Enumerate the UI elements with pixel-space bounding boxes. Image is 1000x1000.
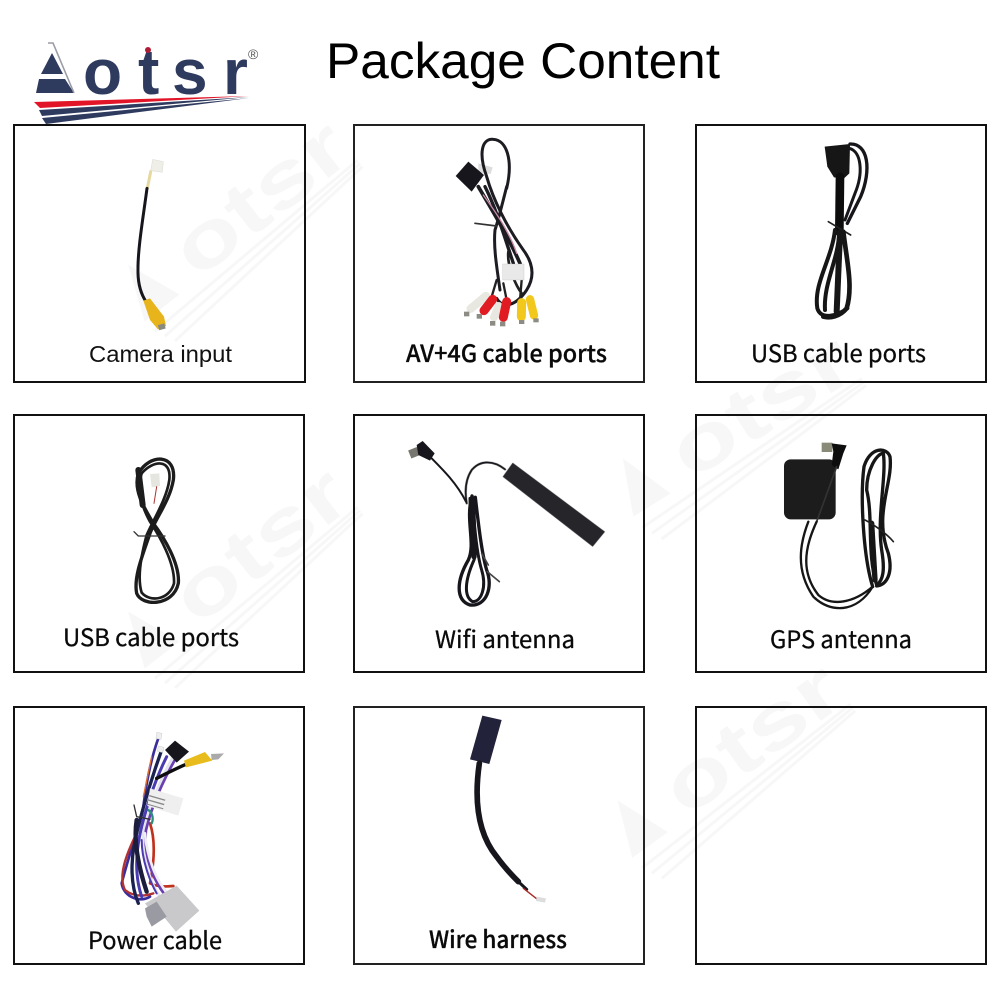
cable: camera input (138, 159, 166, 330)
label: camera input: Camera input (89, 341, 233, 367)
panel: USB cable ports, middle (14, 415, 304, 672)
label: wifi antenna: Wifi antenna (435, 620, 575, 655)
label: AV+4G cable ports: AV+4G cable ports (406, 334, 607, 369)
watermark: lower right: otsr (645, 644, 858, 832)
label: GPS antenna: GPS antenna (770, 620, 912, 655)
label: USB cable ports: USB cable ports (63, 618, 239, 653)
cable: USB coil (134, 459, 178, 602)
panel: wire harness (354, 707, 644, 964)
label: USB cable ports: USB cable ports (751, 334, 926, 369)
cable: power harness (122, 732, 224, 932)
logo: Aotsr (34, 36, 259, 124)
panel: GPS antenna (696, 415, 986, 672)
icon: GPS antenna (784, 443, 893, 608)
watermark: lower right (590, 644, 868, 885)
panel: power cable (14, 707, 304, 964)
logo: Aotsr: otsr (83, 36, 248, 108)
label: power cable: Power cable (88, 921, 222, 956)
panel: camera input (14, 125, 305, 382)
watermark: middle right (596, 315, 878, 545)
panel: empty (696, 707, 986, 964)
logo: Aotsr: ® (248, 46, 259, 62)
watermark: middle right: otsr (653, 315, 869, 496)
cable: USB extension (817, 144, 867, 317)
watermark: upper left: otsr (154, 101, 366, 294)
panel: wifi antenna (354, 415, 644, 672)
panel: USB cable ports, top (696, 125, 986, 382)
watermark: middle left: otsr (154, 448, 366, 641)
cable: wire harness (470, 716, 546, 903)
icon: wifi antenna (408, 441, 605, 605)
watermark: upper left (101, 101, 376, 348)
panel: AV+4G cable ports (354, 125, 644, 382)
label: wire harness: Wire harness (429, 920, 567, 955)
cable: AV+4G bundle (456, 139, 539, 326)
watermark: middle left (101, 448, 376, 695)
title: Package Content (326, 33, 720, 89)
